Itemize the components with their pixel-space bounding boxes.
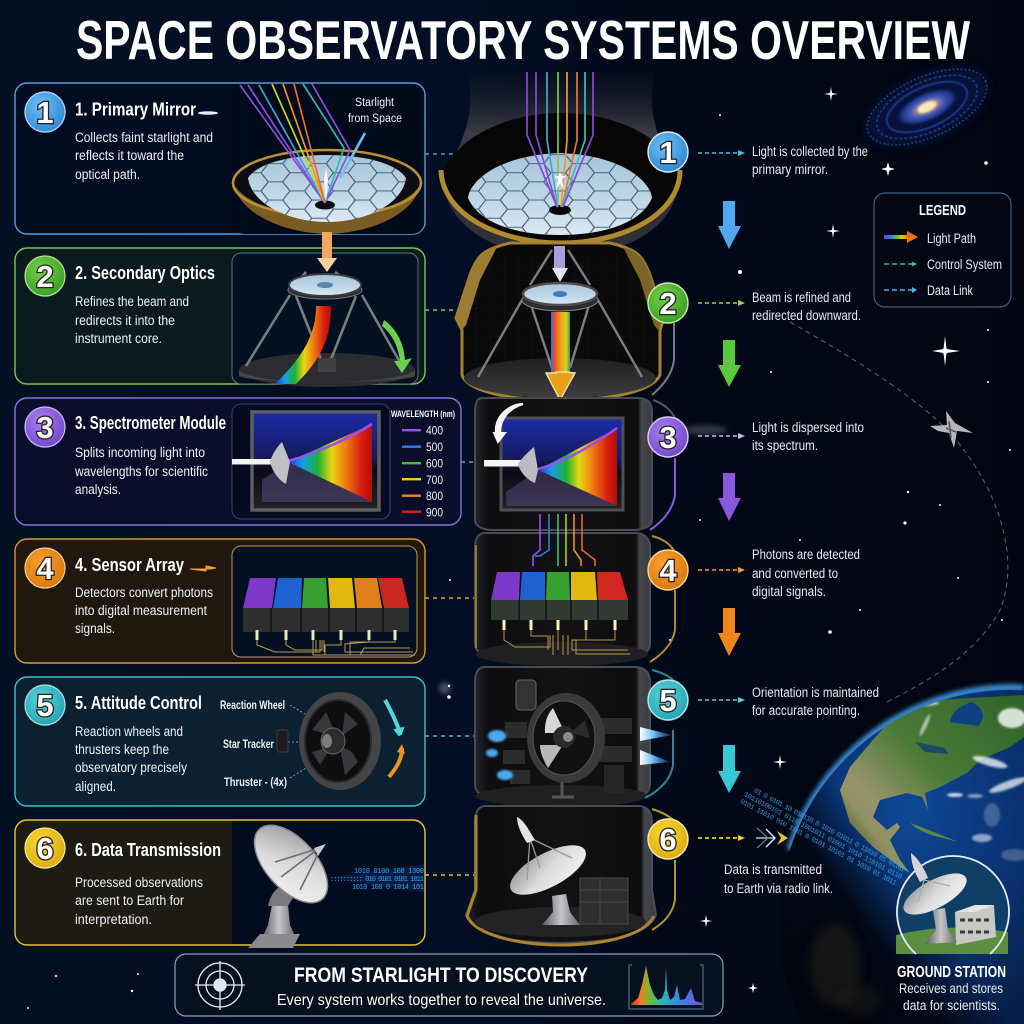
icon: satellite: [930, 411, 973, 448]
legend: data link: Data Link: [927, 283, 973, 298]
panel: data transmission: [15, 812, 425, 948]
description: reflects it toward the: [75, 148, 184, 163]
ground station: [896, 853, 1009, 1013]
station text: data for scientists.: [903, 998, 1000, 1013]
right image background: [232, 821, 424, 944]
label: starlight from space: Starlight: [355, 97, 395, 109]
streak: [190, 566, 216, 571]
wavelength legend: 500: [426, 442, 443, 454]
thruster flames: [486, 727, 672, 780]
step 5 note: for accurate pointing.: [752, 703, 860, 718]
labels: wheel parts: Reaction Wheel: [220, 700, 285, 712]
arrow: mirror to secondary: [317, 232, 337, 272]
number badge 4: [25, 548, 65, 588]
section 2: secondary optics bay: [456, 243, 664, 415]
tower badge 3: 3: [659, 420, 677, 455]
illustration: binary beam: 1010 0100 100 1300: [354, 868, 424, 876]
description: Collects faint starlight and: [75, 130, 213, 145]
description: into digital measurement: [75, 603, 207, 618]
side brackets between badges: [645, 323, 675, 930]
tower badge 5: [648, 680, 688, 720]
footer subtitle: Every system works together to reveal the universe.: [277, 992, 606, 1009]
step 5 note: [698, 685, 879, 718]
wavelength legend: 700: [426, 475, 443, 487]
step 1 note: Light is collected by the: [752, 144, 868, 159]
station badge: [896, 855, 1010, 955]
step 6 note: to Earth via radio link.: [724, 881, 833, 896]
satellite data link path: [790, 322, 1008, 703]
heading: 3. Spectrometer Module: [75, 412, 226, 433]
labels: wheel parts: [220, 700, 306, 789]
heading: 6. Data Transmission: [75, 839, 221, 860]
description: [75, 724, 187, 794]
step 1 note: [698, 144, 868, 177]
tower badge 1: [648, 132, 688, 172]
streak: [198, 111, 218, 115]
wavelength legend: 900: [426, 508, 443, 520]
section 5: attitude control bay: [475, 667, 672, 807]
legend: [874, 193, 1011, 307]
number badge 3: 3: [36, 410, 54, 445]
description: instrument core.: [75, 331, 162, 346]
step 2 note: [698, 290, 861, 323]
tower badge 3: [648, 417, 688, 457]
binary data stream to earth: 10110100101 0110 1001011 01001 1010 110101 0110: [742, 791, 903, 882]
step 2 note: Beam is refined and: [752, 290, 851, 305]
number badge 6: 6: [36, 831, 54, 866]
icon: rotation arrows: [385, 700, 405, 777]
panel: primary mirror: [15, 83, 425, 234]
tower badge 1: 1: [659, 135, 677, 170]
heading: 2. Secondary Optics: [75, 262, 215, 283]
illustration: secondary mirror mount: [232, 253, 418, 387]
description: interpretation.: [75, 912, 152, 927]
description: analysis.: [75, 482, 121, 497]
tower badge 6: 6: [659, 822, 677, 857]
labels: wheel parts: Thruster - (4x): [224, 777, 287, 789]
label: starlight from space: [348, 97, 402, 125]
description: [75, 875, 203, 927]
icon: spectrum chart: [629, 965, 703, 1009]
description: [75, 585, 213, 636]
panel: sensor array: [15, 539, 425, 663]
section 3: spectrometer bay: [475, 398, 652, 530]
description: wavelengths for scientific: [74, 464, 208, 479]
starlight rays: [527, 72, 593, 207]
labels: wheel parts: Star Tracker: [223, 739, 274, 751]
description: [75, 294, 189, 346]
description: Reaction wheels and: [75, 724, 183, 739]
legend: light path: Light Path: [927, 231, 976, 246]
description: Splits incoming light into: [75, 445, 205, 460]
panel: secondary optics: [15, 248, 425, 387]
arrow: step 5 to 6: [718, 745, 741, 793]
step 4 note: and converted to: [752, 566, 838, 581]
description: redirects it into the: [75, 313, 175, 328]
section 4: sensor bay: [475, 530, 650, 666]
description: Refines the beam and: [75, 294, 189, 309]
description: aligned.: [75, 779, 116, 794]
arrow: step 1 to 2: [718, 201, 741, 249]
step 6 note: [698, 828, 833, 896]
description: signals.: [75, 621, 115, 636]
arrow: step 3 to 4: [718, 473, 741, 521]
illustration: reaction wheel: [299, 692, 381, 790]
panel: attitude control: [15, 677, 425, 806]
binary data stream to earth: 01 0 0101 10 010110 0 1010 01011 0 11010 01 01101: [752, 787, 906, 874]
wavelength legend: 400: [426, 426, 443, 438]
footer heading: FROM STARLIGHT TO DISCOVERY: [294, 964, 588, 987]
illustration: binary beam: :::::::::: 010 0101 0101 1011: [330, 876, 424, 884]
station text: [899, 981, 1003, 1013]
section 6: communications bay: [466, 806, 656, 945]
wavelength legend: 800: [426, 491, 443, 503]
arrow: step 2 to 3: [718, 340, 741, 387]
arrow: step 4 to 5: [718, 608, 741, 656]
wavelength legend: [391, 409, 455, 520]
label: starlight from space: from Space: [348, 113, 402, 125]
legend title: LEGEND: [919, 203, 966, 219]
illustration: spectrometer: [232, 404, 390, 519]
number badge 6: [25, 828, 65, 868]
number badge 5: [25, 685, 65, 725]
heading: 1. Primary Mirror: [75, 98, 196, 120]
heading: 4. Sensor Array: [75, 554, 185, 575]
step 3 note: Light is dispersed into: [752, 420, 864, 435]
tower badge 5: 5: [659, 683, 677, 718]
step 2 note: redirected downward.: [752, 308, 861, 323]
footer banner: [175, 954, 723, 1016]
tower badge 2: [648, 283, 688, 323]
description: Processed observations: [75, 875, 203, 890]
illustration: primary mirror with rays: [232, 84, 424, 234]
heading: 5. Attitude Control: [75, 692, 202, 713]
description: optical path.: [75, 167, 140, 182]
wavelength legend: WAVELENGTH (nm): [391, 409, 455, 419]
step 4 note: Photons are detected: [752, 547, 860, 562]
step 4 note: [698, 547, 860, 599]
station dish: [898, 853, 972, 944]
tower badge 6: [648, 819, 688, 859]
step 6 note: Data is transmitted: [724, 862, 822, 877]
description: Detectors convert photons: [75, 585, 213, 600]
description: [74, 445, 208, 497]
connector lines: panels to tower: [425, 154, 486, 875]
number badge 1: 1: [36, 95, 54, 130]
icon: target: [195, 961, 245, 1010]
observatory tower: [441, 72, 680, 945]
number badge 5: 5: [36, 688, 54, 723]
section 1: dome and primary mirror: [441, 72, 680, 256]
illustration: sensor blocks: [232, 546, 417, 657]
binary data stream to earth: 0101 11010 010 1101 0 0101 10101 01 1010 01 1011: [738, 798, 898, 888]
step 4 note: digital signals.: [752, 584, 826, 599]
number badge 2: [25, 256, 65, 296]
number badge 2: 2: [36, 259, 54, 294]
step 1 note: primary mirror.: [752, 162, 828, 177]
tower badge 4: 4: [659, 553, 677, 588]
illustration: binary beam: 1010 100 0 1014 101: [352, 884, 424, 892]
step 3 note: its spectrum.: [752, 438, 818, 453]
legend: control system: Control System: [927, 257, 1002, 272]
panel: spectrometer module: [15, 398, 461, 525]
number badge 4: 4: [36, 551, 54, 586]
illustration: radio dish: [241, 812, 341, 948]
galaxy: [854, 51, 1000, 163]
description: thrusters keep the: [75, 742, 169, 757]
step 5 note: Orientation is maintained: [752, 685, 879, 700]
number badge 1: [25, 92, 65, 132]
description: [75, 130, 213, 182]
number badge 3: [25, 407, 65, 447]
wavelength legend: 600: [426, 458, 443, 470]
illustration: binary beam: [328, 864, 424, 892]
station text: Receives and stores: [899, 981, 1003, 996]
description: are sent to Earth for: [75, 893, 184, 908]
earth: [778, 688, 1024, 1024]
tower badge 2: 2: [659, 286, 677, 321]
step 3 note: [698, 420, 864, 453]
tower badge 4: [648, 550, 688, 590]
description: observatory precisely: [75, 760, 187, 775]
